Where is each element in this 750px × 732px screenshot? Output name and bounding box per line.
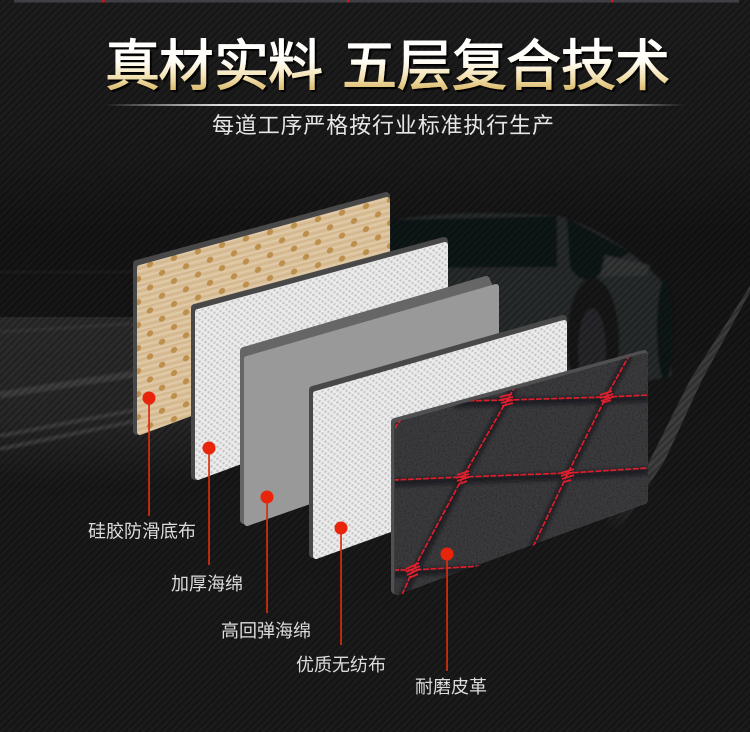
road streaks: [0, 272, 140, 449]
callout: thick sponge: 加厚海绵: [171, 574, 243, 594]
callout: non-woven fabric: 优质无纺布: [296, 655, 386, 675]
callout: high-resilience sponge: [221, 490, 311, 641]
quilting shadows: [391, 356, 649, 599]
road surface left: [0, 317, 200, 487]
leather grain: [395, 352, 648, 594]
panel: high-resilience sponge: [244, 280, 496, 523]
callout: wear-resistant leather: 耐磨皮革: [415, 677, 487, 697]
panel: thick sponge: [195, 241, 445, 477]
road edge line right: [600, 286, 750, 530]
stitch knots: [406, 391, 613, 578]
callout: silicone anti-slip backing: [88, 392, 196, 542]
stitching: [393, 354, 648, 595]
subtitle: 每道工序严格按行业标准执行生产: [212, 113, 554, 138]
title: 真材实料五层复合技术: [105, 35, 670, 97]
panel: non-woven fabric: [313, 319, 564, 556]
callout: high-resilience sponge: 高回弹海绵: [221, 621, 311, 641]
callout: silicone anti-slip backing: 硅胶防滑底布: [88, 522, 196, 542]
callout: non-woven fabric: [296, 522, 386, 675]
panel: wear-resistant leather: [385, 345, 655, 600]
callout: wear-resistant leather: [415, 548, 487, 697]
panel: silicone anti-slip backing: [137, 196, 387, 432]
top strip: [14, 0, 739, 2]
title divider: [105, 104, 685, 106]
callout: thick sponge: [171, 442, 243, 594]
car silhouette: [380, 213, 673, 402]
